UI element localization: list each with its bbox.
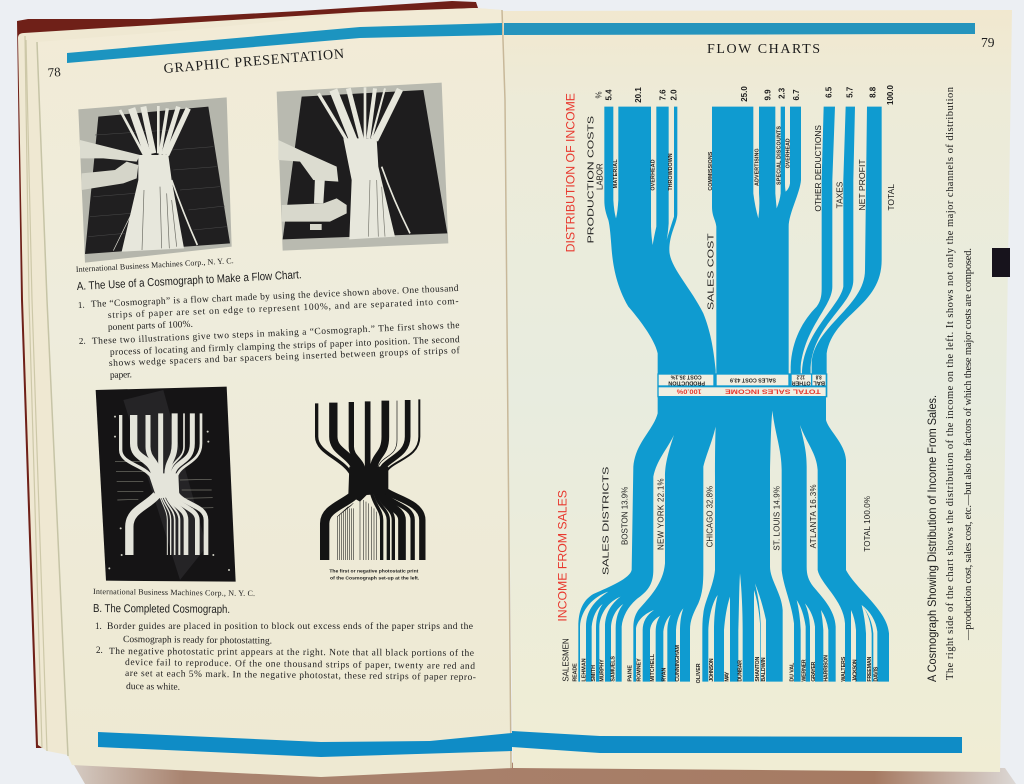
district labels: ATLANTA 16.3% bbox=[809, 484, 818, 548]
district labels: TOTAL 100.0% bbox=[863, 496, 872, 552]
percentages row: 5.7 bbox=[846, 86, 855, 98]
strip labels: OTHER DEDUCTIONS bbox=[814, 125, 823, 212]
heading: income from sales: INCOME FROM SALES bbox=[556, 490, 570, 622]
heading: sales districts: SALES DISTRICTS bbox=[601, 467, 610, 575]
photostat caption: of the Cosmograph set-up at the left. bbox=[330, 576, 419, 581]
red book cover bbox=[17, 1, 480, 748]
centre table: upside-down totals: 8.8 bbox=[816, 374, 822, 380]
percentages row: 25.0 bbox=[740, 86, 749, 102]
flow: sales cost bbox=[712, 107, 801, 375]
flow: taxes bbox=[802, 107, 855, 375]
salesman labels: DAVIS bbox=[874, 666, 880, 682]
strip labels: SALES COST bbox=[706, 233, 715, 310]
text block A: ponent parts of 100%. bbox=[108, 319, 193, 333]
percentages row: 6.5 bbox=[825, 86, 834, 98]
strip labels: SPECIAL DISCOUNTS bbox=[777, 126, 783, 185]
percentages row: 9.9 bbox=[763, 89, 772, 101]
salesman labels: SHANTON bbox=[755, 657, 761, 682]
text block B: Border guides are placed in position to block out excess ends of the paper strips and the bbox=[107, 621, 473, 632]
salesman labels: SALESMEN bbox=[561, 638, 570, 682]
photo: locating strips on the cosmograph bbox=[78, 97, 232, 263]
page number 78: 78 bbox=[47, 64, 61, 80]
salesman labels: HARRISON bbox=[824, 655, 830, 682]
salesman labels: MURPHY bbox=[599, 659, 605, 682]
black thumb tab bbox=[992, 248, 1010, 277]
district labels bbox=[620, 478, 872, 552]
salesman labels: FREEMAN bbox=[867, 657, 873, 682]
salesman labels: GRAYER bbox=[811, 662, 817, 682]
chart description: —production cost, sales cost, etc.—but also the factors of which these major costs are composed. bbox=[963, 248, 974, 641]
text block A: 1. bbox=[78, 300, 85, 310]
heading B: B. The Completed Cosmograph. bbox=[93, 603, 230, 616]
text block A: paper. bbox=[110, 370, 132, 381]
salesman labels: JOHNSON bbox=[709, 658, 715, 682]
table shadow under book bbox=[70, 758, 1016, 784]
page gutter bbox=[502, 10, 511, 768]
text block A: strips of paper are set on edge to represent 100%, and are separated into com- bbox=[108, 296, 459, 321]
text block B: Cosmograph is ready for photostatting. bbox=[123, 634, 272, 647]
salesman labels: OLIVER bbox=[696, 663, 702, 683]
centre table: upside-down totals: 12.2 bbox=[797, 374, 805, 380]
centre table: upside-down totals: PRODUCTION bbox=[668, 380, 705, 386]
photo: negative photostatic print bbox=[317, 399, 422, 581]
district labels: ST. LOUIS 14.9% bbox=[772, 486, 781, 551]
stacked page edges bbox=[18, 8, 512, 768]
centre table: upside-down totals: SALES COST 43.9 bbox=[730, 376, 776, 382]
percentages row: 7.6 bbox=[659, 89, 668, 101]
strip labels: MATERIAL bbox=[613, 159, 619, 188]
text block A: shows wedge spacers and bar spacers being inserted between groups of strips of bbox=[109, 345, 461, 369]
strip labels: THROWDOWN bbox=[668, 153, 674, 191]
strip labels: LABOR bbox=[596, 163, 605, 190]
centre table: upside-down totals bbox=[657, 373, 827, 397]
text block A: process of locating and firmly clamping the strips of paper into position. The second bbox=[110, 334, 460, 358]
strip labels bbox=[596, 125, 896, 310]
bottom blue bar: left page bbox=[98, 732, 512, 757]
salesman labels: SMITH bbox=[591, 665, 597, 682]
salesman labels: WERNER bbox=[802, 659, 808, 682]
percentages row: 2.3 bbox=[778, 87, 787, 99]
salesman labels: RYAN bbox=[662, 668, 668, 682]
page fold line bbox=[37, 42, 68, 756]
strip labels: TAXES bbox=[836, 182, 845, 208]
salesman labels: WALTERS bbox=[841, 656, 847, 682]
salesman labels: LEHMAN bbox=[582, 658, 588, 682]
strip labels: TOTAL bbox=[887, 183, 896, 211]
caption: IBM credit B: International Business Machines Corp., N. Y. C. bbox=[93, 587, 255, 598]
salesman labels: SAMUELS bbox=[610, 656, 616, 682]
text block A: The “Cosmograph” is a flow chart made by using the device shown above. One thousand bbox=[91, 283, 459, 310]
chart description bbox=[945, 86, 974, 680]
salesman labels: MAY bbox=[724, 671, 730, 682]
chart title: A Cosmograph Showing Distribution of Income From Sales. bbox=[925, 395, 939, 682]
salesman labels bbox=[561, 638, 880, 683]
flow: production costs bbox=[604, 107, 716, 375]
strip labels: COMMISSIONS bbox=[708, 151, 714, 191]
text block B: 1. bbox=[95, 621, 102, 631]
right page bbox=[502, 10, 1012, 772]
text block B: 2. bbox=[96, 645, 103, 655]
text block A: 2. bbox=[79, 336, 86, 346]
salesman labels: MITCHELL bbox=[650, 653, 656, 682]
salesman labels: JACKSON bbox=[853, 659, 859, 682]
heading A: A. The Use of a Cosmograph to Make a Flow Chart. bbox=[77, 269, 302, 293]
top blue bar: left page bbox=[67, 23, 502, 63]
strip labels: OVERHEAD bbox=[651, 159, 657, 191]
text block A: These two illustrations give two steps in making a “Cosmograph.” The first shows the bbox=[92, 320, 460, 347]
percentages row: 5.4 bbox=[605, 89, 614, 101]
strip labels: OVERHEAD bbox=[785, 138, 791, 168]
chart description: The right side of the chart shows the distribution of the income on the left. It shows not only the major channels of distribution bbox=[945, 86, 956, 680]
percentages row bbox=[595, 84, 895, 105]
percentages row: 6.7 bbox=[792, 89, 801, 101]
centre table: upside-down totals: TOTAL SALES INCOME bbox=[724, 387, 821, 394]
centre table: upside-down totals: OTHER bbox=[792, 380, 811, 386]
district labels: CHICAGO 32.8% bbox=[706, 486, 715, 547]
salesman labels: PAINE bbox=[628, 665, 634, 682]
salesman labels: DUNBAR bbox=[738, 660, 744, 682]
top blue bar: right page bbox=[504, 23, 975, 35]
percentages row: 8.8 bbox=[869, 86, 878, 98]
flow chart: distribution of income (upper half) bbox=[563, 84, 896, 375]
percentages row: 100.0 bbox=[886, 84, 895, 105]
stack lines bbox=[25, 36, 47, 751]
salesman labels: DU VAL bbox=[789, 662, 795, 682]
left page running head: GRAPHIC PRESENTATION bbox=[163, 47, 345, 77]
heading: production costs: PRODUCTION COSTS bbox=[586, 116, 595, 243]
centre table: upside-down totals: BAL bbox=[813, 380, 825, 386]
text block B: The negative photostatic print appears at the right. Note that all black portions of the bbox=[109, 646, 474, 659]
flow: districts and salesmen bbox=[578, 375, 889, 682]
percentages row: % bbox=[595, 91, 604, 99]
heading: distribution of income: DISTRIBUTION OF INCOME bbox=[563, 93, 577, 252]
salesman labels: ROMNEY bbox=[637, 658, 643, 682]
text block B: are set at each 5% mark. In the negative photostat, these red strips of paper repro- bbox=[125, 668, 476, 683]
strip labels: ADVERTISING bbox=[755, 148, 761, 186]
photostat caption bbox=[329, 569, 419, 581]
photo: completed cosmograph set-up bbox=[96, 387, 236, 582]
percentages row: 20.1 bbox=[634, 87, 643, 103]
salesman labels: CUNNINGHAM bbox=[675, 644, 681, 682]
centre table: upside-down totals: COST 35.1% bbox=[670, 374, 702, 380]
flow chart: income from sales (lower half) bbox=[556, 375, 889, 683]
flow: net profit bbox=[812, 107, 882, 375]
caption: IBM credit A: International Business Machines Corp., N. Y. C. bbox=[76, 256, 234, 274]
centre table: upside-down totals: 100.0% bbox=[677, 387, 702, 394]
page number 79: 79 bbox=[981, 35, 995, 50]
text block A bbox=[78, 283, 461, 381]
district labels: BOSTON 13.9% bbox=[620, 487, 629, 545]
left page bbox=[37, 8, 512, 777]
salesman labels: READE bbox=[573, 663, 579, 682]
photo: inserting spacers bbox=[277, 83, 448, 251]
right page running head: FLOW CHARTS bbox=[707, 42, 820, 57]
text block B bbox=[95, 621, 476, 693]
text block B: duce as white. bbox=[126, 682, 180, 693]
flow: other deductions bbox=[791, 107, 835, 375]
district labels: NEW YORK 22.1% bbox=[656, 478, 665, 550]
salesman labels: BALDWIN bbox=[761, 657, 767, 682]
photostat caption: The first or negative photostatic print bbox=[329, 569, 419, 574]
percentages row: 2.0 bbox=[670, 89, 679, 101]
bottom blue bar: right page bbox=[512, 731, 962, 753]
strip labels: NET PROFIT bbox=[858, 159, 867, 211]
text block B: device fail to reproduce. Of the one thousand strips of paper, twenty are red and bbox=[125, 657, 475, 672]
